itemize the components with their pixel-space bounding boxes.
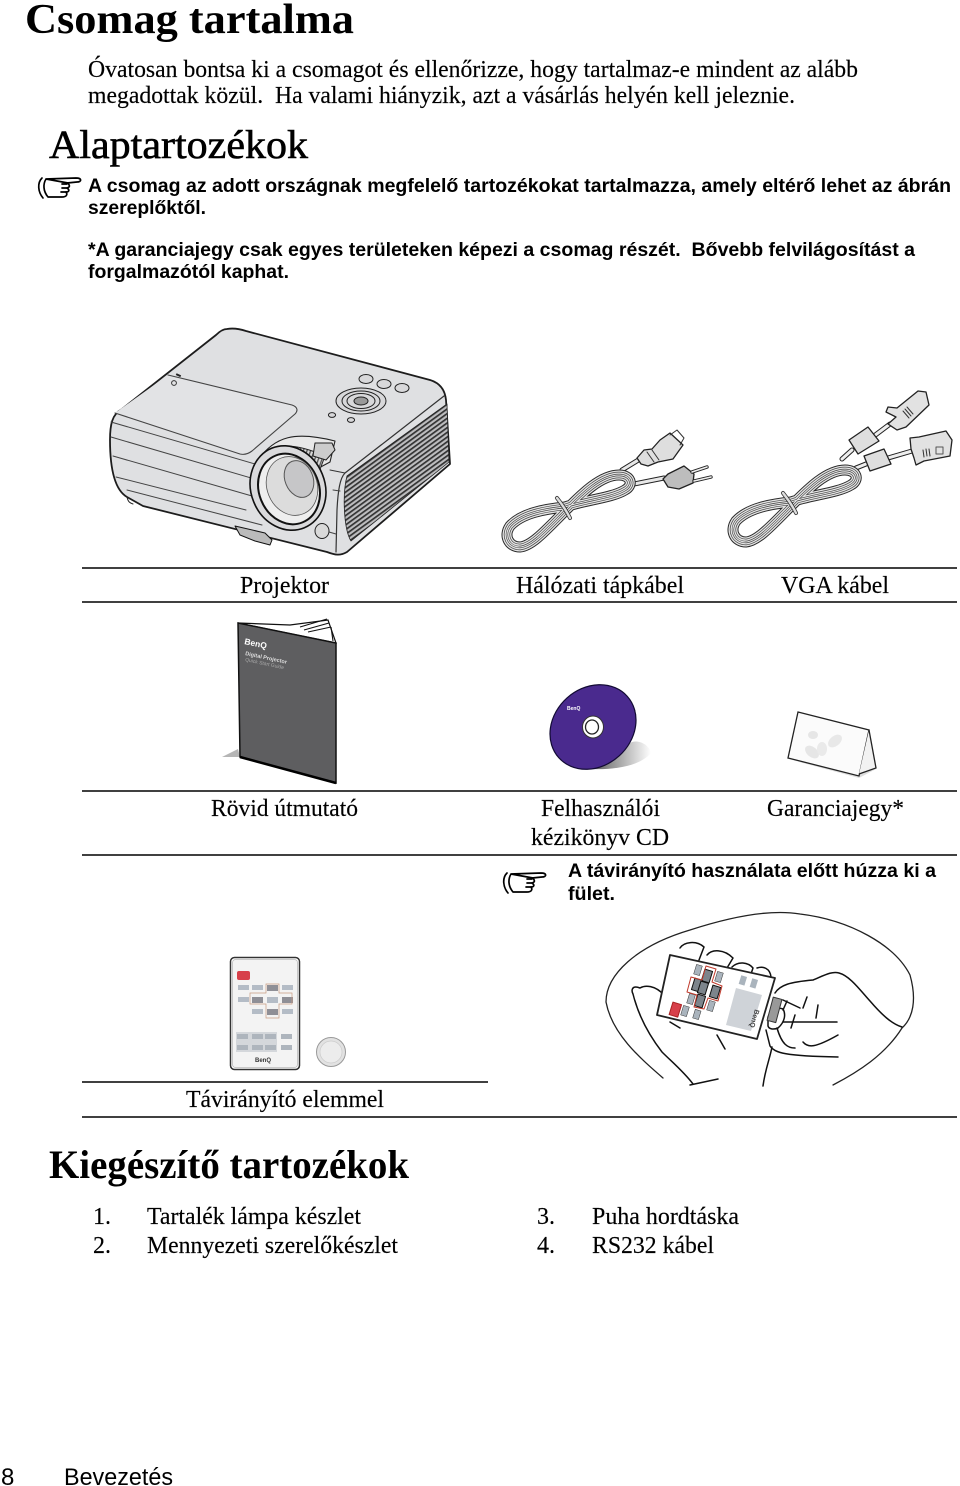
warranty note text: *A garanciajegy csak egyes területeken képezi a csomag részét. Bővebb felvilágosítást a	[88, 240, 915, 261]
accessories list: 2.	[93, 1233, 111, 1259]
illustration: hands pulling remote tab: BenQ	[747, 1008, 760, 1029]
accessories list	[93, 1204, 739, 1259]
lens barrel	[258, 436, 335, 478]
illustration: quick start guide booklet: Digital Projector	[245, 651, 288, 666]
labels row 1: Projektor	[240, 573, 329, 599]
foot adjuster	[235, 526, 272, 545]
pulling finger and thumb	[768, 1008, 785, 1029]
note text	[88, 176, 951, 219]
heading: optional accessories: Kiegészítő tartozékok	[49, 1142, 410, 1187]
illustration: quick start guide booklet	[222, 619, 336, 783]
palm creases	[670, 1022, 772, 1086]
note: pull the tab	[568, 861, 936, 905]
IR window	[315, 524, 329, 538]
illustration: user manual CD	[533, 667, 653, 787]
illustration: quick start guide booklet: BenQ	[244, 636, 268, 651]
heading: Alaptartozékok: Alaptartozékok	[49, 122, 308, 167]
accessories list: 1.	[93, 1204, 111, 1230]
logo and led marks	[172, 381, 176, 385]
illustration: power cable	[507, 430, 711, 547]
labels row 1	[240, 573, 889, 599]
intro text	[88, 56, 858, 109]
intro text: Óvatosan bontsa ki a csomagot és ellenőrizze, hogy tartalmaz-e mindent az alább	[88, 56, 858, 83]
icon: pointing hand note	[39, 178, 81, 198]
table rules row 2	[82, 791, 957, 855]
accessories list: Tartalék lámpa készlet	[147, 1204, 361, 1230]
right hand back	[775, 972, 902, 1027]
control panel	[328, 374, 409, 422]
note: pull the tab: A távirányító használata előtt húzza ki a	[568, 861, 936, 882]
illustration: user manual CD: BenQ	[567, 706, 580, 712]
note text: A csomag az adott országnak megfelelő tartozékokat tartalmazza, amely eltérő lehet az ábrán	[88, 176, 951, 197]
accessories list: Puha hordtáska	[592, 1204, 739, 1230]
note: pull the tab: fület.	[568, 884, 615, 905]
accessories list: Mennyezeti szerelőkészlet	[147, 1233, 398, 1259]
icon: pointing hand note 2	[504, 873, 546, 893]
illustration: remote control and battery: BenQ	[255, 1058, 271, 1064]
cords and ferrites	[842, 424, 912, 468]
accessories list: 3.	[537, 1204, 555, 1230]
labels row 2: Garanciajegy*	[767, 796, 904, 822]
labels row 2: Felhasználói	[541, 796, 660, 822]
warranty note text	[88, 240, 915, 283]
fingers behind remote	[680, 943, 704, 960]
illustration: quick start guide booklet: Quick Start Guide	[245, 657, 285, 671]
labels row 2	[211, 796, 904, 851]
accessories list: RS232 kábel	[592, 1233, 714, 1259]
table rules row 1	[82, 568, 957, 602]
illustration: warranty card	[788, 712, 876, 778]
left thumb and palm	[632, 986, 693, 1084]
illustration: VGA cable	[733, 391, 952, 542]
labels row 2: kézikönyv CD	[531, 825, 669, 851]
side vents	[344, 404, 449, 541]
labels row 1: VGA kábel	[781, 573, 889, 599]
intro text: megadottak közül. Ha valami hiányzik, azt a vásárlás helyén kell jeleznie.	[88, 83, 795, 109]
footer	[1, 1464, 173, 1486]
illustration: remote control and battery	[230, 958, 346, 1070]
labels row 2: Rövid útmutató	[211, 796, 358, 822]
illustration: projector	[110, 329, 450, 555]
table rules row 3	[82, 1082, 957, 1117]
accessories list: 4.	[537, 1233, 555, 1259]
illustration: hands pulling remote tab	[606, 912, 913, 1086]
note text: szereplőktől.	[88, 198, 206, 219]
label: remote: Távirányító elemmel	[186, 1087, 384, 1113]
lamp cover	[115, 375, 297, 454]
labels row 1: Hálózati tápkábel	[516, 573, 684, 599]
warranty note text: forgalmazótól kaphat.	[88, 262, 289, 283]
